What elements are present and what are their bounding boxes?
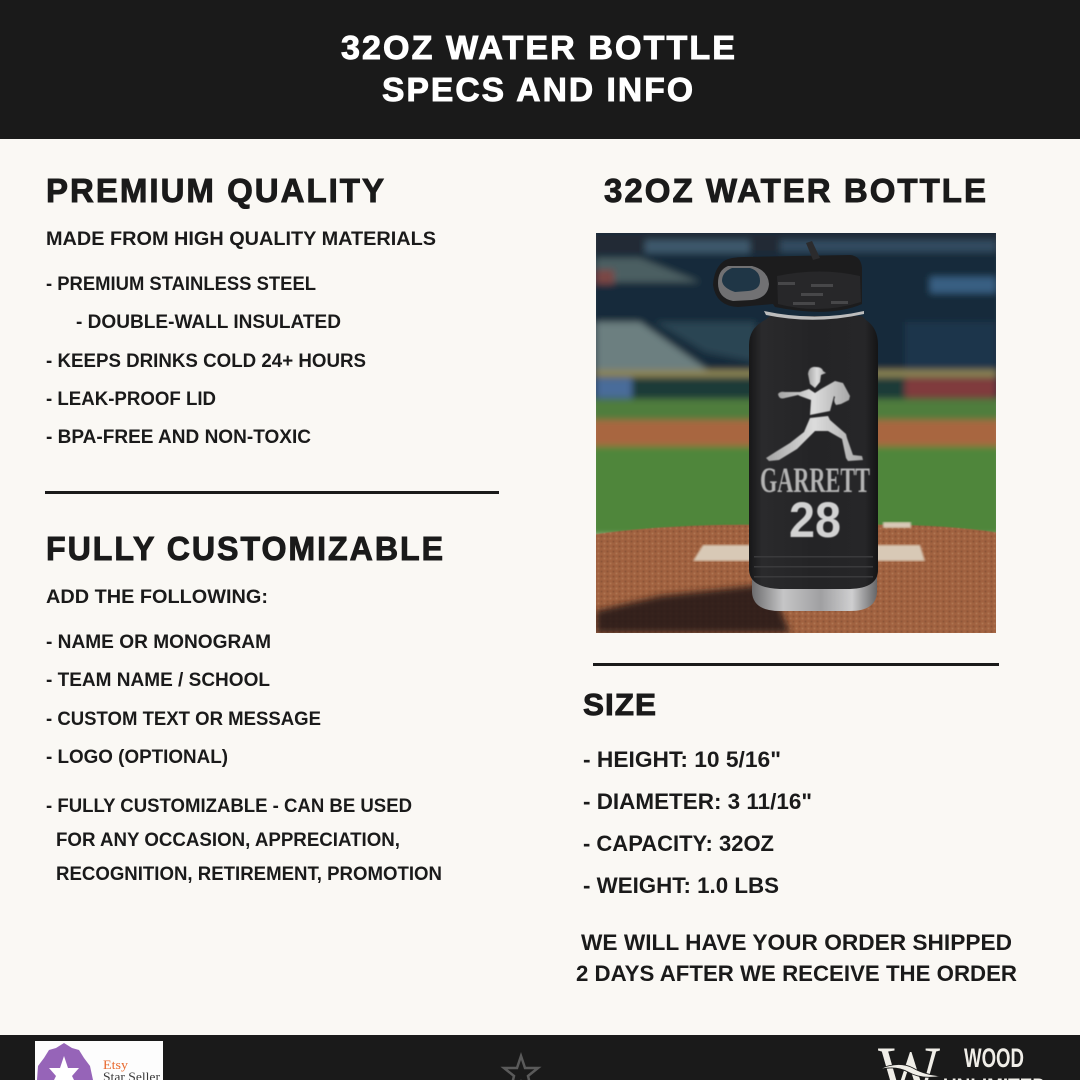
product photo: bottle on pitcher's mound xyxy=(590,225,1002,640)
customization option list: - LOGO (OPTIONAL) xyxy=(46,746,228,768)
Wood Unlimited logo xyxy=(878,1030,1046,1080)
size specifications xyxy=(583,747,812,898)
size specifications: - HEIGHT: 10 5/16" xyxy=(583,747,781,772)
Etsy star seller badge xyxy=(35,1041,163,1080)
pitching rubber xyxy=(693,545,925,561)
shipping note: WE WILL HAVE YOUR ORDER SHIPPED xyxy=(581,930,1012,955)
panel: premium quality xyxy=(46,172,436,448)
premium quality feature list: MADE FROM HIGH QUALITY MATERIALS xyxy=(46,228,436,250)
customization option list: FOR ANY OCCASION, APPRECIATION, xyxy=(56,829,400,851)
footer band xyxy=(0,1030,1080,1080)
bottle body xyxy=(749,316,878,589)
heading: premium quality: PREMIUM QUALITY xyxy=(46,172,386,209)
customization option list: - FULLY CUSTOMIZABLE - CAN BE USED xyxy=(46,795,412,817)
shipping note: 2 DAYS AFTER WE RECEIVE THE ORDER xyxy=(576,961,1017,986)
bottle base steel xyxy=(752,575,877,611)
stadium background xyxy=(590,225,1002,536)
engraved name: Garrett: GARRETT xyxy=(760,460,870,500)
header band with title: SPECS AND INFO xyxy=(382,71,695,108)
straw xyxy=(806,241,820,260)
heading: fully customizable: FULLY CUSTOMIZABLE xyxy=(46,530,445,567)
customization option list xyxy=(46,586,442,885)
premium quality feature list: - BPA-FREE AND NON-TOXIC xyxy=(46,426,311,448)
header band with title: 32OZ WATER BOTTLE xyxy=(341,29,737,66)
star icon xyxy=(504,1056,538,1080)
pitcher's mound xyxy=(590,525,1000,640)
Etsy star seller badge: Etsy xyxy=(103,1058,129,1072)
engraved number: 28: 28 xyxy=(789,492,841,548)
bottle xyxy=(713,241,878,611)
size specifications: - WEIGHT: 1.0 LBS xyxy=(583,873,779,898)
Wood Unlimited logo: WOOD xyxy=(964,1043,1024,1073)
premium quality feature list xyxy=(46,228,436,448)
header band with title xyxy=(0,0,1080,139)
heading: product name: 32OZ WATER BOTTLE xyxy=(604,172,988,209)
customization option list: - TEAM NAME / SCHOOL xyxy=(46,669,270,691)
size specifications: - CAPACITY: 32OZ xyxy=(583,831,774,856)
premium quality feature list: - KEEPS DRINKS COLD 24+ HOURS xyxy=(46,350,366,372)
customization option list: ADD THE FOLLOWING: xyxy=(46,586,268,608)
premium quality feature list: - DOUBLE-WALL INSULATED xyxy=(76,311,341,333)
neck ring xyxy=(764,311,864,320)
premium quality feature list: - PREMIUM STAINLESS STEEL xyxy=(46,273,316,295)
customization option list: - NAME OR MONOGRAM xyxy=(46,631,271,653)
heading: size: SIZE xyxy=(583,687,657,722)
lid xyxy=(713,241,862,312)
bottle shadow xyxy=(596,584,790,633)
premium quality feature list: - LEAK-PROOF LID xyxy=(46,388,216,410)
customization option list: - CUSTOM TEXT OR MESSAGE xyxy=(46,708,321,730)
laser engraving: pitcher figure xyxy=(766,367,863,461)
customization option list: RECOGNITION, RETIREMENT, PROMOTION xyxy=(56,863,442,885)
panel: fully customizable xyxy=(46,530,445,885)
shipping note xyxy=(576,930,1017,986)
panel: size xyxy=(583,687,812,898)
lid handle loop xyxy=(718,266,769,301)
size specifications: - DIAMETER: 3 11/16" xyxy=(583,789,812,814)
